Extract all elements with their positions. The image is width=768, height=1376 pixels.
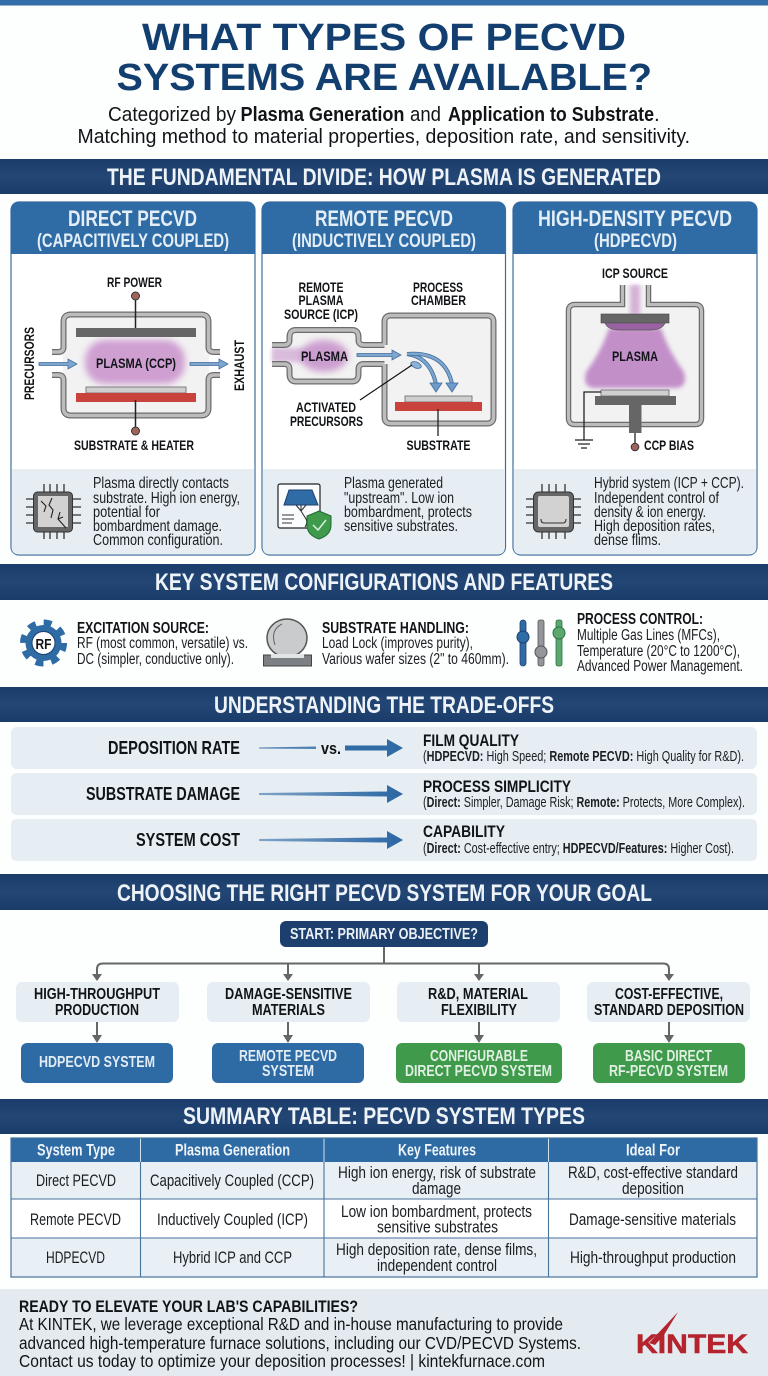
feature: excitation source: DC (simpler, conductive only). bbox=[77, 651, 234, 668]
arrow: substrate damage to process simplicity bbox=[259, 785, 403, 803]
table row: remote PECVD bbox=[30, 1203, 736, 1236]
diagram: capacitively coupled chamber: EXHAUST bbox=[231, 340, 247, 391]
diagram: inductively coupled remote source: ACTIVATED bbox=[296, 399, 356, 415]
panel description: remote PECVD bbox=[263, 469, 505, 554]
table row: HDPECVD: High-throughput production bbox=[570, 1249, 736, 1267]
table row: direct PECVD bbox=[36, 1164, 738, 1198]
result: remote PECVD system bbox=[212, 1043, 364, 1083]
panel description: direct PECVD: substrate. High ion energy, bbox=[93, 490, 240, 507]
table row: remote PECVD: Inductively Coupled (ICP) bbox=[157, 1211, 308, 1229]
table row: direct PECVD: damage bbox=[412, 1180, 461, 1198]
panel: direct PECVD bbox=[11, 202, 255, 555]
diagram: inductively coupled remote source: PRECURSORS bbox=[290, 413, 363, 429]
summary table bbox=[11, 1138, 757, 1277]
trade-off row: system cost vs capability bbox=[11, 819, 757, 861]
result: basic direct RF-PECVD system: BASIC DIRECT bbox=[625, 1048, 712, 1065]
footer call to action: Contact us today to optimize your deposition processes! | kintekfurnace.com bbox=[19, 1351, 545, 1371]
title bbox=[116, 17, 652, 99]
diagram: hybrid high-density chamber: CCP BIAS bbox=[644, 437, 694, 453]
diagram: hybrid high-density chamber: PLASMA bbox=[612, 348, 658, 364]
logo: KINTEK: KINTEK bbox=[636, 1329, 749, 1359]
title: WHAT TYPES OF PECVD bbox=[142, 17, 626, 59]
table header row bbox=[37, 1142, 680, 1160]
panel description: remote PECVD: "upstream". Low ion bbox=[344, 490, 454, 507]
subtitle: Categorized by bbox=[108, 103, 237, 126]
panel description: remote PECVD: bombardment, protects bbox=[344, 504, 472, 521]
feature: excitation source bbox=[23, 620, 248, 668]
trade-off row: deposition rate vs film quality: DEPOSITION RATE bbox=[108, 737, 240, 758]
arrow: system cost to capability bbox=[259, 831, 403, 849]
subtitle bbox=[78, 103, 690, 148]
panel description: direct PECVD bbox=[12, 469, 254, 554]
diagram: capacitively coupled chamber: RF POWER bbox=[107, 274, 162, 290]
table row: direct PECVD: deposition bbox=[622, 1180, 684, 1198]
trade-off row: system cost vs capability: CAPABILITY bbox=[423, 822, 506, 841]
diagram: inductively coupled remote source: CHAMBER bbox=[411, 292, 466, 308]
result: configurable direct PECVD system bbox=[396, 1043, 562, 1083]
icon: document and green shield bbox=[278, 484, 331, 539]
panel description: high-density PECVD: High deposition rates, bbox=[594, 518, 715, 535]
panel heading: direct PECVD: DIRECT PECVD bbox=[68, 206, 197, 231]
diagram: inductively coupled remote source: SUBSTRATE bbox=[406, 437, 470, 453]
table row: remote PECVD: sensitive substrates bbox=[377, 1218, 498, 1236]
feature: excitation source: RF (most common, versatile) vs. bbox=[77, 635, 248, 652]
feature: substrate handling: Load Lock (improves purity), bbox=[322, 635, 473, 652]
table row: direct PECVD: Direct PECVD bbox=[36, 1172, 116, 1190]
table header row: Plasma Generation bbox=[175, 1142, 290, 1160]
panel description: direct PECVD: Plasma directly contacts bbox=[93, 475, 229, 492]
subtitle: Matching method to material properties, deposition rate, and sensitivity. bbox=[78, 125, 690, 148]
result: HDPECVD system: HDPECVD SYSTEM bbox=[39, 1054, 155, 1071]
subtitle: and bbox=[410, 103, 441, 126]
table row: remote PECVD: Remote PECVD bbox=[30, 1211, 121, 1229]
table row: HDPECVD: HDPECVD bbox=[46, 1249, 105, 1267]
flow start node: START: PRIMARY OBJECTIVE? bbox=[290, 926, 478, 943]
diagram: inductively coupled remote source: PROCESS bbox=[413, 279, 463, 295]
goal: high-throughput production bbox=[16, 982, 179, 1022]
result: configurable direct PECVD system: DIRECT PECVD SYSTEM bbox=[405, 1063, 552, 1080]
diagram: hybrid high-density chamber bbox=[568, 265, 702, 453]
arrow: deposition rate to film quality bbox=[259, 739, 403, 758]
panel heading: remote PECVD: (INDUCTIVELY COUPLED) bbox=[292, 230, 476, 252]
icon: RF gear: RF bbox=[36, 636, 52, 653]
goal: cost-effective standard deposition: COST-EFFECTIVE, bbox=[615, 986, 723, 1003]
panel description: direct PECVD: Common configuration. bbox=[93, 532, 223, 549]
diagram: inductively coupled remote source: PLASMA bbox=[301, 348, 348, 364]
banner: choosing the right system bbox=[0, 874, 768, 910]
panel heading: high-density PECVD: (HDPECVD) bbox=[594, 230, 677, 252]
banner: choosing the right system: CHOOSING THE RIGHT PECVD SYSTEM FOR YOUR GOAL bbox=[117, 880, 652, 907]
trade-off row: system cost vs capability: (Direct: Cost-effective entry; HDPECVD/Features: Higher Cost). bbox=[423, 841, 734, 857]
subtitle: . bbox=[654, 103, 660, 126]
footer call to action bbox=[0, 1289, 768, 1376]
diagram: inductively coupled remote source: SOURCE (ICP) bbox=[284, 306, 358, 322]
trade-off row: substrate damage vs process simplicity bbox=[11, 773, 757, 815]
goal: cost-effective standard deposition bbox=[587, 982, 750, 1022]
panel description: remote PECVD: Plasma generated bbox=[344, 475, 443, 492]
result: remote PECVD system: REMOTE PECVD bbox=[239, 1048, 337, 1065]
feature: process control: Multiple Gas Lines (MFCs), bbox=[577, 627, 720, 644]
feature: process control: PROCESS CONTROL: bbox=[577, 611, 703, 628]
table row: HDPECVD: independent control bbox=[377, 1257, 497, 1275]
panel description: high-density PECVD: density & ion energy. bbox=[594, 504, 706, 521]
icon: RF gear bbox=[23, 622, 64, 664]
feature: substrate handling bbox=[264, 619, 509, 668]
table row: HDPECVD: High deposition rate, dense films, bbox=[336, 1241, 537, 1259]
diagram: capacitively coupled chamber bbox=[21, 274, 247, 453]
panel heading: remote PECVD: REMOTE PECVD bbox=[315, 206, 453, 231]
trade-off row: deposition rate vs film quality bbox=[11, 727, 757, 769]
feature: process control bbox=[517, 611, 743, 675]
panel description: direct PECVD: potential for bbox=[93, 504, 161, 521]
diagram: capacitively coupled chamber: PRECURSORS bbox=[21, 327, 37, 400]
panel description: high-density PECVD bbox=[514, 469, 756, 554]
table row: direct PECVD: High ion energy, risk of substrate bbox=[338, 1164, 536, 1182]
diagram: inductively coupled remote source: REMOTE bbox=[298, 279, 344, 295]
table row: direct PECVD: Capacitively Coupled (CCP) bbox=[150, 1172, 314, 1190]
banner: understanding the trade-offs bbox=[0, 687, 768, 722]
goal: damage-sensitive materials bbox=[207, 982, 370, 1022]
trade-off row: system cost vs capability: SYSTEM COST bbox=[136, 829, 241, 850]
trade-off row: deposition rate vs film quality: FILM QUALITY bbox=[423, 731, 520, 750]
arrow: deposition rate to film quality: vs. bbox=[321, 739, 341, 758]
subtitle: Plasma Generation bbox=[240, 103, 404, 126]
logo: KINTEK bbox=[636, 1312, 749, 1359]
panel heading: direct PECVD: (CAPACITIVELY COUPLED) bbox=[37, 230, 229, 252]
table row: remote PECVD: Damage-sensitive materials bbox=[569, 1211, 736, 1229]
table header row: Key Features bbox=[398, 1142, 476, 1160]
feature: substrate handling: Various wafer sizes (2" to 460mm). bbox=[322, 651, 509, 668]
icon: wafer on stage bbox=[264, 619, 312, 666]
subtitle: Application to Substrate bbox=[448, 103, 654, 126]
footer call to action: advanced high-temperature furnace solutions, including our CVD/PECVD Systems. bbox=[19, 1333, 581, 1353]
footer call to action: READY TO ELEVATE YOUR LAB'S CAPABILITIES? bbox=[19, 1298, 358, 1316]
result: basic direct RF-PECVD system: RF-PECVD SYSTEM bbox=[609, 1063, 728, 1080]
feature: excitation source: EXCITATION SOURCE: bbox=[77, 620, 209, 637]
diagram: inductively coupled remote source: PLASMA bbox=[298, 292, 344, 308]
goal: damage-sensitive materials: DAMAGE-SENSITIVE bbox=[225, 986, 352, 1003]
panel heading: direct PECVD bbox=[11, 202, 255, 254]
flow start node bbox=[280, 921, 488, 947]
feature: substrate handling: SUBSTRATE HANDLING: bbox=[322, 620, 469, 637]
banner: summary table bbox=[0, 1099, 768, 1134]
decision flowchart bbox=[16, 921, 750, 1083]
panel description: high-density PECVD: dense flims. bbox=[594, 532, 661, 549]
trade-off row: substrate damage vs process simplicity: PROCESS SIMPLICITY bbox=[423, 777, 572, 796]
panel description: direct PECVD: bombardment damage. bbox=[93, 518, 222, 535]
panel description: high-density PECVD: Independent control of bbox=[594, 490, 719, 507]
result: basic direct RF-PECVD system bbox=[593, 1043, 745, 1083]
panel heading: remote PECVD bbox=[262, 202, 506, 254]
trade-off row: substrate damage vs process simplicity: SUBSTRATE DAMAGE bbox=[86, 783, 240, 804]
banner: the fundamental divide bbox=[0, 159, 768, 194]
banner: key system configurations bbox=[0, 564, 768, 600]
goal: high-throughput production: PRODUCTION bbox=[55, 1002, 139, 1019]
panel heading: high-density PECVD bbox=[513, 202, 757, 254]
panel description: remote PECVD: sensitive substrates. bbox=[344, 518, 458, 535]
icon: intact chip bbox=[526, 484, 581, 539]
goal: R&D material flexibility: FLEXIBILITY bbox=[441, 1002, 517, 1019]
diagram: capacitively coupled chamber: SUBSTRATE & HEATER bbox=[74, 437, 194, 453]
table row: HDPECVD: Hybrid ICP and CCP bbox=[173, 1249, 292, 1267]
goal: R&D material flexibility: R&D, MATERIAL bbox=[428, 986, 528, 1003]
goal: damage-sensitive materials: MATERIALS bbox=[252, 1002, 325, 1019]
diagram: capacitively coupled chamber: PLASMA (CCP) bbox=[96, 355, 176, 371]
table header row: System Type bbox=[37, 1142, 115, 1160]
diagram: inductively coupled remote source bbox=[272, 279, 494, 453]
diagram: hybrid high-density chamber: ICP SOURCE bbox=[602, 265, 668, 281]
table row: HDPECVD bbox=[46, 1241, 736, 1275]
result: HDPECVD system bbox=[21, 1043, 173, 1083]
title: SYSTEMS ARE AVAILABLE? bbox=[116, 57, 652, 99]
panel: high-density PECVD bbox=[513, 202, 757, 555]
result: configurable direct PECVD system: CONFIGURABLE bbox=[430, 1048, 528, 1065]
goal: R&D material flexibility bbox=[397, 982, 560, 1022]
flow connectors bbox=[92, 947, 674, 1043]
banner: understanding the trade-offs: UNDERSTANDING THE TRADE-OFFS bbox=[214, 692, 554, 719]
banner: key system configurations: KEY SYSTEM CONFIGURATIONS AND FEATURES bbox=[155, 569, 613, 596]
icon: control sliders bbox=[517, 620, 565, 666]
footer call to action: At KINTEK, we leverage exceptional R&D and in-house manufacturing to provide bbox=[19, 1314, 563, 1334]
panel: remote PECVD bbox=[262, 202, 506, 555]
result: remote PECVD system: SYSTEM bbox=[262, 1063, 314, 1080]
table header row: Ideal For bbox=[626, 1142, 680, 1160]
table row: remote PECVD: Low ion bombardment, protects bbox=[341, 1203, 532, 1221]
goal: high-throughput production: HIGH-THROUGHPUT bbox=[34, 986, 160, 1003]
banner: summary table: SUMMARY TABLE: PECVD SYSTEM TYPES bbox=[183, 1103, 585, 1130]
icon: cracked chip bbox=[26, 484, 81, 539]
